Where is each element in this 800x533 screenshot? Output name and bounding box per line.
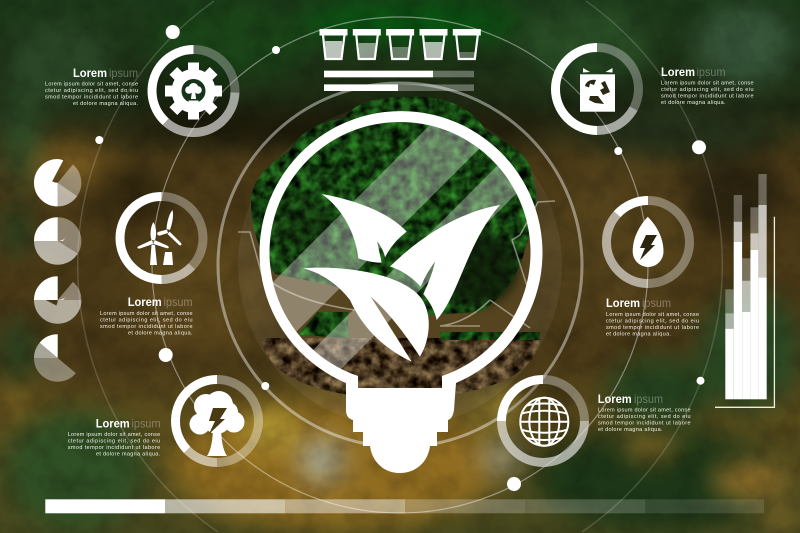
text block: recycling: ipsum: [696, 65, 726, 79]
text block: drop: [606, 296, 699, 338]
text block: wind: smod tempor incididunt ut labore: [100, 324, 192, 330]
text block: tree: ipsum: [132, 416, 160, 430]
text block: wind: Lorem: [128, 295, 162, 309]
text block: drop: Lorem ipsum dolor sit amet, conse: [606, 312, 699, 318]
glass reflection stripes: [273, 126, 516, 369]
ground behind the tree: [329, 293, 506, 338]
icon: three leaves: [303, 194, 500, 362]
text block: tree: ctetur adipiscing elit, sed do eiu: [68, 438, 160, 444]
text block: tree: et dolore magna aliqua.: [96, 452, 161, 458]
text block: drop: ipsum: [642, 296, 671, 310]
icon: recycling box: [580, 68, 615, 112]
text block: globe: [598, 392, 690, 433]
text block: drop: smod tempor incididunt ut labore: [606, 325, 699, 331]
text block: gear: ipsum: [109, 66, 138, 80]
donut: recycling bin: [541, 33, 653, 145]
cup 2: [353, 29, 381, 59]
icon: wind turbines: [137, 210, 181, 265]
cup 5: [453, 29, 481, 59]
pie 1: [41, 166, 74, 199]
icon: gear with tree: [165, 62, 222, 120]
text block: gear: smod tempor incididunt ut labore: [45, 95, 138, 101]
text block: drop: ctetur adipiscing elit, sed do eiu: [606, 318, 699, 324]
progress bars under cups: [324, 71, 474, 91]
chart axis: [715, 217, 774, 407]
pie 2: [41, 225, 74, 257]
text block: gear: et dolore magna aliqua.: [73, 101, 138, 107]
text block: recycling: Lorem ipsum dolor sit amet, conse: [661, 80, 754, 86]
text block: globe: smod tempor incididunt ut labore: [598, 421, 690, 427]
pie 3: [41, 283, 74, 317]
text block: globe: Lorem ipsum dolor sit amet, conse: [598, 408, 690, 414]
donut: wind turbines: [103, 179, 220, 297]
pie 4: [41, 341, 74, 375]
text block: drop: Lorem: [606, 296, 640, 310]
text block: wind: et dolore magna aliqua.: [128, 330, 193, 336]
photo: tree on glass globe: [238, 97, 562, 427]
donut: globe: [497, 375, 589, 467]
text block: recycling: Lorem: [661, 65, 695, 79]
text block: globe: Lorem: [598, 392, 632, 406]
bar chart: stacked columns: [715, 174, 774, 407]
cup 3: [386, 29, 414, 59]
icon: light bulb outline: [260, 111, 543, 473]
text block: globe: et dolore magna aliqua.: [598, 427, 663, 433]
text block: tree: Lorem ipsum dolor sit amet, conse: [68, 432, 160, 438]
text block: tree: Lorem: [96, 416, 130, 430]
dots on orbits: [95, 25, 706, 491]
icon: globe grid: [520, 398, 568, 446]
text block: globe: ipsum: [634, 392, 663, 406]
text block: gear: Lorem: [73, 66, 107, 80]
text block: wind: ipsum: [164, 295, 192, 309]
tree foliage: [251, 97, 536, 315]
cup 1: [320, 29, 348, 59]
donut: tree with bolt: [158, 362, 276, 480]
text block: recycling: smod tempor incididunt ut labore: [661, 94, 754, 100]
donut: energy drop: [589, 183, 707, 301]
text block: drop: et dolore magna aliqua.: [606, 332, 671, 338]
text block: recycling: ctetur adipiscing elit, sed do eiu: [661, 87, 754, 93]
text block: globe: ctetur adipiscing elit, sed do eiu: [598, 414, 690, 420]
cups row: [320, 29, 481, 59]
text block: gear: [45, 66, 138, 107]
soil hemisphere: [262, 338, 540, 398]
text block: wind: Lorem ipsum dolor sit amet, conse: [100, 311, 192, 317]
icon: tree with lightning: [190, 391, 244, 456]
text block: gear: ctetur adipiscing elit, sed do eiu: [45, 88, 138, 94]
icon: water drop with bolt: [633, 217, 664, 267]
cup 4: [420, 29, 448, 59]
text block: tree: smod tempor incididunt ut labore: [68, 445, 160, 451]
donut: gear: [135, 32, 252, 150]
bottom segmented progress bar: [45, 499, 764, 513]
grass patches: [298, 312, 540, 340]
text block: wind: ctetur adipiscing elit, sed do eiu: [100, 318, 192, 324]
text block: recycling: et dolore magna aliqua.: [661, 100, 726, 106]
text block: wind: [100, 295, 193, 336]
pie charts column: [41, 166, 74, 375]
glass globe wires: [238, 201, 555, 328]
text block: recycling: [661, 65, 754, 106]
text block: tree: [68, 416, 161, 458]
text block: gear: Lorem ipsum dolor sit amet, conse: [45, 82, 138, 88]
